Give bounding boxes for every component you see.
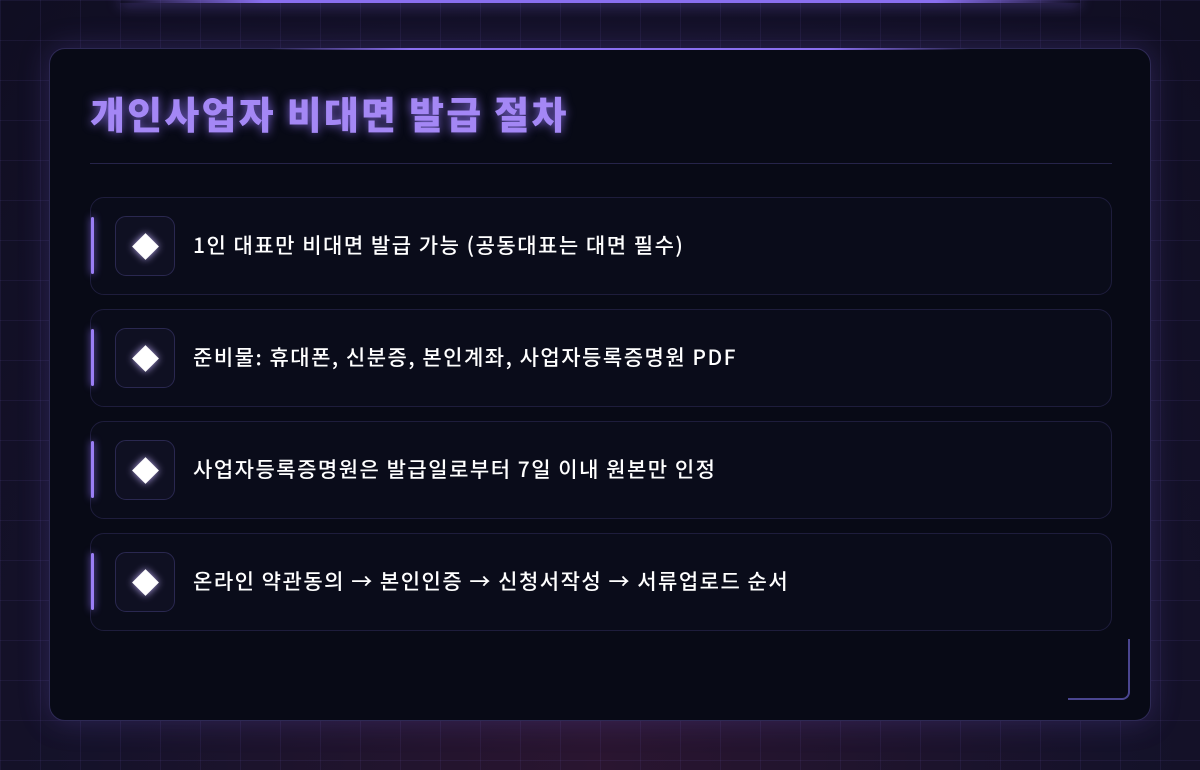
text 4: 온라인 약관동의 → 본인인증 → 신청서작성 → 서류업로드 순서: [193, 566, 789, 596]
text 3: 사업자등록증명원은 발급일로부터 7일 이내 원본만 인정: [193, 454, 716, 484]
item 4: [90, 533, 1112, 631]
icon: diamond: [115, 440, 175, 500]
title: 개인사업자 비대면 발급 절차: [90, 85, 569, 140]
icon: diamond: [115, 328, 175, 388]
decorative corner bracket: [1068, 639, 1130, 700]
item 1: [90, 197, 1112, 295]
text 1: 1인 대표만 비대면 발급 가능 (공동대표는 대면 필수): [193, 230, 684, 260]
item 2: [90, 309, 1112, 407]
item 3: [90, 421, 1112, 519]
text 2: 준비물: 휴대폰, 신분증, 본인계좌, 사업자등록증명원 PDF: [193, 342, 737, 372]
icon: diamond: [115, 216, 175, 276]
icon: diamond: [115, 552, 175, 612]
